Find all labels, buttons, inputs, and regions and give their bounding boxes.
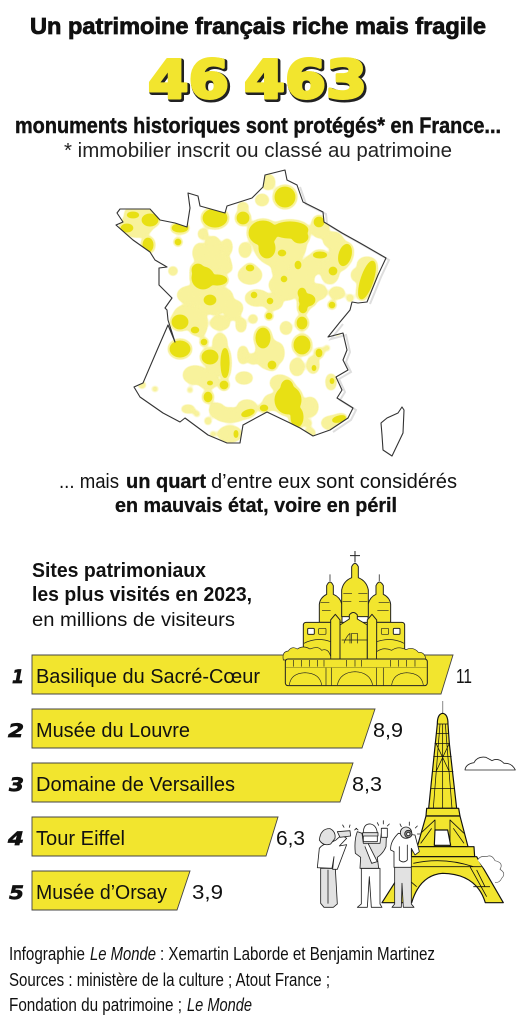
bar 3: 8,3 [352,774,382,796]
conclusion line 1: un quart [126,471,206,493]
bar 4 [7,817,305,856]
illustration: Sacré-Cœur basilica [283,551,427,686]
chart heading: Sites patrimoniaux [32,560,206,582]
chart heading [32,560,252,631]
tourist 3 [391,822,420,907]
bar chart [7,655,472,910]
bar 1: 11 [456,666,472,688]
bar 3: 3 [9,774,24,796]
bar 5: 3,9 [192,882,223,904]
map of France [116,170,404,456]
bar 1: 1 [12,666,24,688]
bar 5: 5 [9,882,24,904]
bar 1 [12,655,472,694]
bar 3 [9,763,382,802]
bar 5 [9,871,223,910]
conclusion line 1: ... mais [59,471,119,493]
big number 46 463: 463 [244,50,367,111]
big number 46 463: 46 [150,52,230,112]
credits: : Xemartin Laborde et Benjamin Martinez [160,944,435,964]
density areas [121,176,379,440]
credits: Infographie [9,944,85,964]
credits: Le Monde [187,995,252,1015]
bar 2: Musée du Louvre [36,720,190,742]
bar 3: Domaine de Versailles [36,774,235,796]
conclusion line 2: en mauvais état, voire en péril [115,495,397,517]
illustration: clouds [465,757,515,883]
illustration: Eiffel Tower [382,701,503,903]
bar 2: 8,9 [373,720,403,742]
big number 46 463: 463 [246,52,368,112]
big number 46 463 [148,50,368,112]
chart heading: les plus visités en 2023, [32,584,252,606]
tourist 1 [317,825,357,907]
illustration: tourists [317,821,420,907]
credits: Le Monde [90,944,156,964]
bar 2: 2 [8,720,24,742]
credits [9,944,435,1015]
France outline [116,170,386,443]
bar 1: Basilique du Sacré-Cœur [36,666,260,688]
title: Un patrimoine français riche mais fragile [30,13,486,39]
bar 4: Tour Eiffel [36,828,125,850]
bar 5: Musée d’Orsay [36,882,167,904]
Corsica [381,407,404,456]
conclusion line 1 [59,471,457,493]
map shadow [300,187,389,432]
bar 2 [8,709,403,748]
bar 4: 6,3 [276,828,305,850]
credits: Sources : ministère de la culture ; Atout France ; [9,970,330,990]
big number 46 463: 46 [148,50,229,111]
footnote: * immobilier inscrit ou classé au patrimoine [64,140,452,162]
chart heading: en millions de visiteurs [32,609,235,631]
tourist 2 [355,821,389,907]
bar 4: 4 [7,828,24,850]
conclusion line 1: d’entre eux sont considérés [211,471,457,493]
credits: Fondation du patrimoine ; [9,995,182,1015]
